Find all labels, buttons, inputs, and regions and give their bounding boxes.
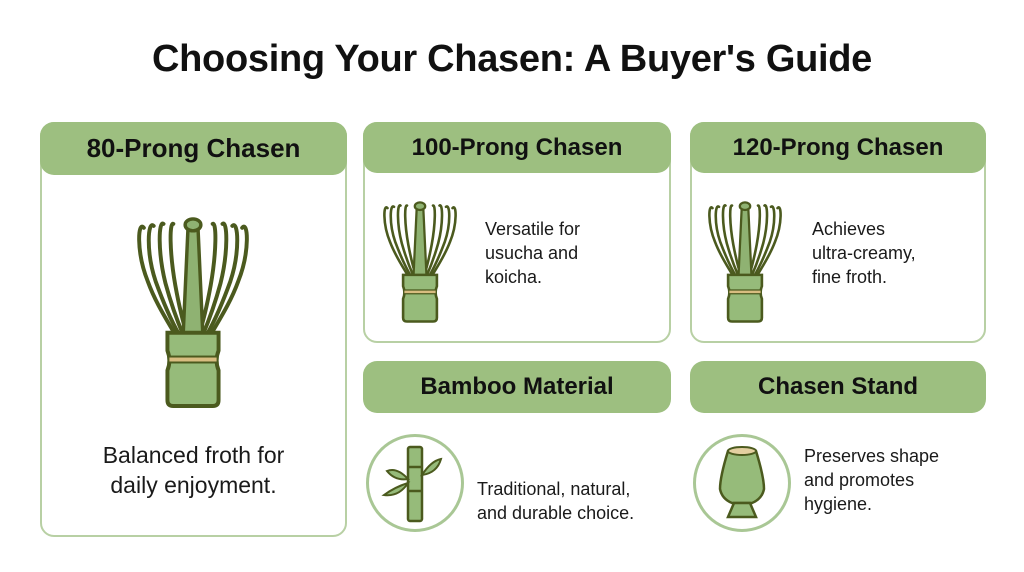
icon: stand <box>693 434 791 532</box>
text: stand: Preserves shape <box>804 446 939 466</box>
heading: stand: Chasen Stand <box>758 373 918 400</box>
heading: 120-prong <box>690 122 986 173</box>
panel: 100-prong <box>363 122 671 343</box>
heading: 80-prong: 80-Prong Chasen <box>87 133 300 163</box>
text: stand: and promotes <box>804 470 914 490</box>
text: 80-prong: daily enjoyment. <box>110 472 277 498</box>
heading: 100-prong: 100-Prong Chasen <box>412 134 622 161</box>
text: 80-prong <box>103 442 284 498</box>
text: 120-prong: ultra-creamy, <box>812 243 916 263</box>
text: 80-prong: Balanced froth for <box>103 442 284 468</box>
heading: stand <box>690 361 986 413</box>
icon: whisk 100 <box>383 201 457 323</box>
heading: 120-prong: 120-Prong Chasen <box>733 134 943 161</box>
icon: bamboo <box>366 434 464 532</box>
text: 120-prong: fine froth. <box>812 267 887 287</box>
text: bamboo <box>477 479 634 523</box>
text: 100-prong: koicha. <box>485 267 542 287</box>
text: stand <box>804 446 939 514</box>
heading: bamboo <box>363 361 671 413</box>
heading: bamboo: Bamboo Material <box>420 373 614 400</box>
icon: whisk 120 <box>708 201 782 323</box>
panel: bamboo <box>363 361 671 532</box>
text: bamboo: Traditional, natural, <box>477 479 630 499</box>
text: 120-prong: Achieves <box>812 219 885 239</box>
heading: 80-prong <box>40 122 347 175</box>
heading: 100-prong <box>363 122 671 173</box>
text: stand: hygiene. <box>804 494 872 514</box>
text: 100-prong: Versatile for <box>485 219 580 239</box>
text: 100-prong: usucha and <box>485 243 578 263</box>
panel: stand <box>690 361 986 532</box>
panel: 120-prong <box>690 122 986 343</box>
text: bamboo: and durable choice. <box>477 503 634 523</box>
title: Choosing Your Chasen: A Buyer's Guide <box>152 38 872 80</box>
text: 100-prong <box>485 219 580 287</box>
panel: 80-prong <box>40 122 347 537</box>
text: 120-prong <box>812 219 916 287</box>
icon: large whisk <box>137 217 249 408</box>
